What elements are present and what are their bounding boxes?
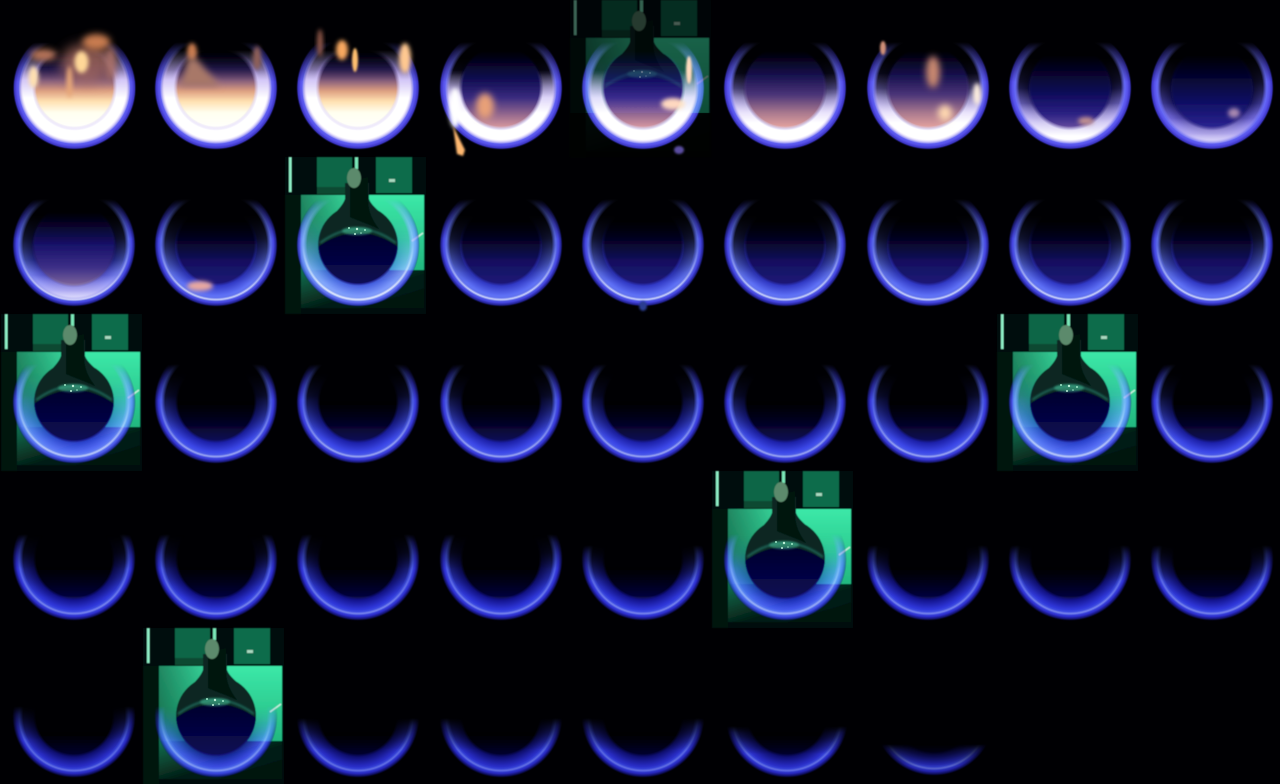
flame frame 37 <box>12 654 136 778</box>
flame frame 32 <box>582 546 704 620</box>
flame frame 20 <box>154 365 278 464</box>
flame frame 39 <box>296 654 420 778</box>
photo frame with flask, row 5 <box>143 628 284 784</box>
flame frame 1 <box>12 26 136 150</box>
row 2: blue flames with lavender rim <box>12 157 1274 314</box>
flame frame 41 <box>581 654 705 778</box>
flame frame 11 <box>154 200 278 306</box>
flame frame 18 <box>1150 200 1274 306</box>
row 1: bright sooty flames <box>12 0 1274 157</box>
flame frame 2 <box>154 40 278 150</box>
photo frame with flask, row 3 right <box>997 314 1138 471</box>
flame frame 13 <box>440 200 562 306</box>
flame frame 3 <box>296 26 420 150</box>
photo frame with flask, row 2 <box>285 157 426 314</box>
flame frame 14 <box>582 200 704 312</box>
row 4: shrinking blue flames <box>12 471 1274 628</box>
flame frame 40 <box>439 654 563 778</box>
flame frame 36 <box>1150 497 1274 621</box>
flame frame 6 <box>723 43 847 150</box>
flame frame 15 <box>724 200 846 306</box>
flame frame 17 <box>1008 200 1132 306</box>
flame frame 7 <box>866 40 990 150</box>
photo frame with flask, row 3 left <box>1 314 142 471</box>
flame frame 35 <box>1008 546 1132 620</box>
flame frame 23 <box>582 365 704 464</box>
flame frame 34 <box>866 546 990 620</box>
flame frame 30 <box>296 535 420 620</box>
flame frame 28 <box>12 535 136 620</box>
flame frame 42 <box>725 654 849 778</box>
flame frame 8 <box>1008 43 1132 150</box>
flame frame 29 <box>154 535 278 620</box>
flame frame 27 <box>1150 365 1274 464</box>
photo frame with flask, row 1 <box>570 0 711 157</box>
flame frame 16 <box>866 200 990 306</box>
flame frame 22 <box>440 365 562 464</box>
flame frame 21 <box>296 365 420 464</box>
row 3: blue flames <box>1 314 1274 471</box>
flame frame 10 <box>12 200 136 306</box>
flame frame 4 <box>439 43 563 158</box>
flame frame 9 <box>1150 43 1274 150</box>
flame frame 25 <box>866 365 990 464</box>
photo frame with flask, row 4 <box>712 471 853 628</box>
flame frame 24 <box>724 365 846 464</box>
flame frame 43 <box>872 652 996 776</box>
flame frame 31 <box>440 535 562 620</box>
row 5: final dying flames <box>12 628 996 784</box>
